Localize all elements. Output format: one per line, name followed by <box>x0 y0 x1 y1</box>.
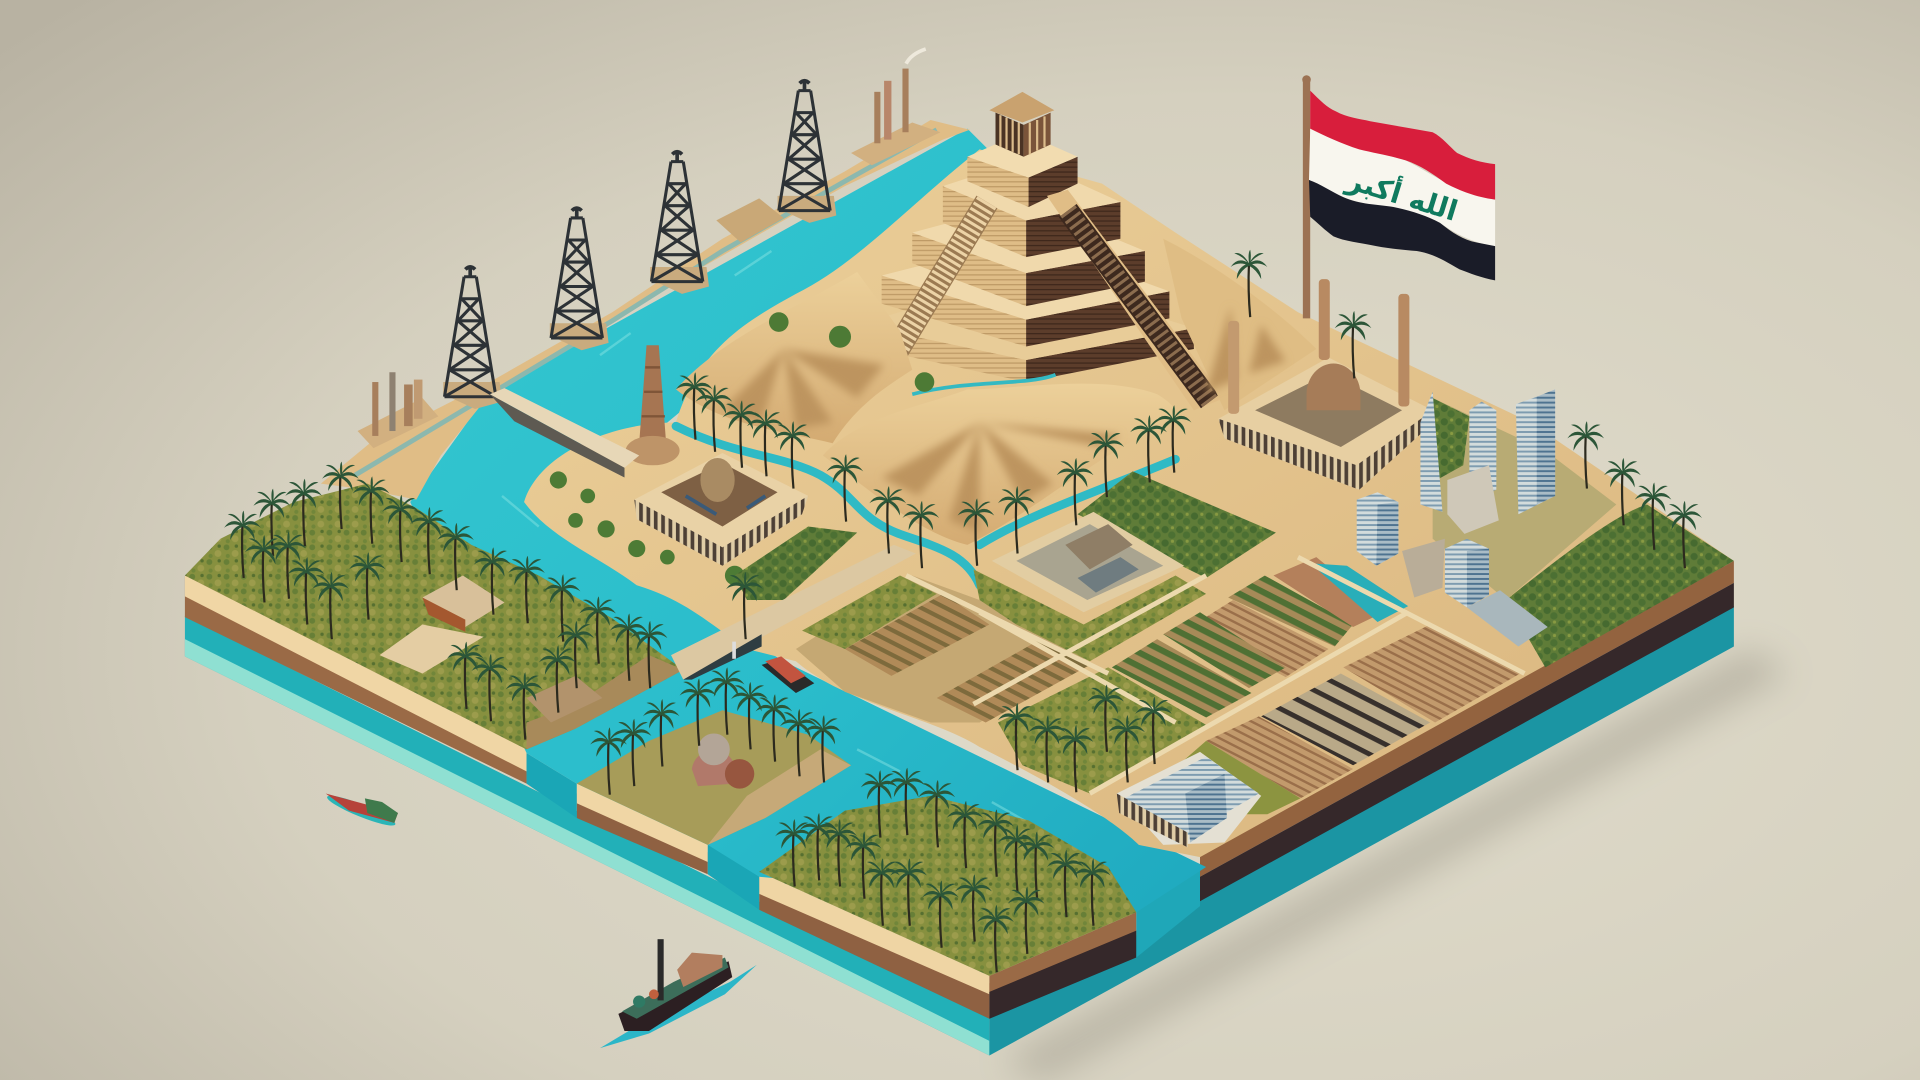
factory west <box>358 372 438 448</box>
ship mast <box>658 939 664 1000</box>
oil derrick 2 <box>550 208 609 350</box>
east land base <box>524 149 1734 857</box>
east scrub <box>1506 504 1734 667</box>
crop field south <box>937 639 1092 722</box>
north bridge <box>490 388 639 478</box>
skyscraper district <box>1357 389 1555 647</box>
west hill <box>676 272 912 443</box>
water highlights <box>502 251 1029 823</box>
minaret centre <box>1319 279 1330 360</box>
hill stream <box>912 375 1056 394</box>
tower 5 shaded side <box>1376 502 1398 566</box>
compound buildings <box>1016 524 1163 600</box>
block shadow <box>1004 649 1788 1080</box>
tower 4 <box>1447 465 1499 534</box>
east ridge sand <box>1047 190 1224 410</box>
cargo ship <box>600 939 757 1048</box>
island domes <box>692 750 735 786</box>
west soil face <box>185 576 527 784</box>
low centre <box>1402 539 1445 598</box>
ship wake <box>600 965 757 1048</box>
tower 3 <box>1516 389 1555 514</box>
west farmhouse <box>380 576 504 673</box>
main water surface <box>410 129 1206 912</box>
tower 1 <box>1420 392 1442 512</box>
canal pond <box>1310 563 1408 622</box>
tower 2 <box>1469 402 1496 500</box>
tier 3 <box>912 233 1026 306</box>
crop field north <box>845 594 989 676</box>
water layer right face <box>989 606 1734 1056</box>
green strip <box>802 576 937 649</box>
road network <box>906 557 1524 793</box>
ship hull <box>618 961 732 1031</box>
streams <box>676 426 1176 585</box>
tier 4 <box>882 276 1026 347</box>
west staircase <box>887 202 987 367</box>
ploughed field <box>1343 624 1524 722</box>
oil derrick 3 <box>650 152 709 294</box>
small boat <box>325 791 398 830</box>
factory east <box>851 49 940 165</box>
field tan <box>1190 600 1329 677</box>
west land brown shore <box>527 655 683 749</box>
water channel gap right <box>1136 867 1200 958</box>
tier 2 <box>943 186 1026 257</box>
field mixed <box>1112 639 1251 718</box>
oil derrick 1 <box>443 267 502 409</box>
flag pole <box>1303 81 1310 318</box>
west shed <box>527 676 602 722</box>
field vegetables <box>1228 576 1353 647</box>
mosque courtyard <box>1255 373 1402 447</box>
north oil bank <box>321 49 970 500</box>
middle island <box>577 710 851 845</box>
ship deck cargo <box>633 989 659 1008</box>
bushes on slope <box>769 312 934 392</box>
low block <box>1467 590 1548 647</box>
west green land <box>185 484 683 749</box>
block side faces <box>185 561 1734 1056</box>
flag white band <box>1309 129 1495 246</box>
sand hills <box>676 239 1316 545</box>
bank sand strip <box>321 120 970 500</box>
island soil face <box>577 793 708 874</box>
flag black band <box>1309 180 1495 280</box>
tower 6 <box>1445 539 1489 607</box>
minaret west <box>1228 321 1239 414</box>
field green rows <box>1163 612 1286 688</box>
oil derrick 4 <box>778 81 836 223</box>
tier 5 <box>857 324 1026 382</box>
palm trees <box>224 250 1702 972</box>
compound plinth <box>992 512 1184 612</box>
ziggurat <box>857 92 1224 410</box>
palm grove field <box>998 667 1206 793</box>
ship deck <box>622 958 729 1019</box>
tier 1 <box>967 157 1029 207</box>
minaret east <box>1398 294 1409 407</box>
peninsula bushes <box>550 471 744 585</box>
tan furrow field <box>1206 716 1353 798</box>
north farm field base <box>796 576 1090 722</box>
mosque complex <box>1218 279 1433 490</box>
temple core <box>661 463 778 527</box>
brick minaret <box>639 345 666 443</box>
tower 3 shaded side <box>1537 389 1555 504</box>
water layer left face <box>185 616 989 1056</box>
water channel gap two <box>708 842 759 910</box>
pump station <box>716 198 784 242</box>
shrine <box>989 92 1054 157</box>
farm region <box>796 398 1734 847</box>
mosque plinth <box>1218 358 1433 487</box>
flag <box>1302 75 1495 318</box>
temple plinth <box>634 453 808 557</box>
striped field <box>1261 673 1430 765</box>
compound greenery <box>973 569 1206 661</box>
dome <box>1307 363 1360 410</box>
market patch <box>1273 557 1384 627</box>
flag red band <box>1310 91 1495 200</box>
east hill <box>823 384 1175 545</box>
peninsula orchard <box>735 527 857 600</box>
orchard patch <box>1078 471 1276 578</box>
east plot bushes <box>1430 398 1469 484</box>
south soil face right <box>989 912 1136 1019</box>
island land <box>577 710 851 845</box>
lower beach hotel <box>1117 752 1261 847</box>
tower 6 shaded side <box>1467 549 1489 607</box>
east soil face <box>1200 561 1734 877</box>
island sandy shore <box>708 749 851 845</box>
ship superstructure <box>677 953 722 987</box>
water channel gap one <box>527 753 577 818</box>
east plot scrub <box>1433 398 1616 600</box>
peninsula temple <box>626 345 808 566</box>
east staircase <box>1068 211 1210 402</box>
flag pole finial <box>1302 75 1311 84</box>
south palm land <box>759 796 1136 976</box>
lower bridge <box>671 545 916 680</box>
north east slope <box>1163 239 1316 410</box>
bank canal <box>355 130 937 475</box>
tower 5 <box>1357 492 1398 566</box>
river boat <box>762 656 814 693</box>
flag inscription: الله أكبر <box>1341 161 1462 228</box>
field grass fringe <box>1157 741 1300 814</box>
south soil face left <box>759 877 989 1019</box>
